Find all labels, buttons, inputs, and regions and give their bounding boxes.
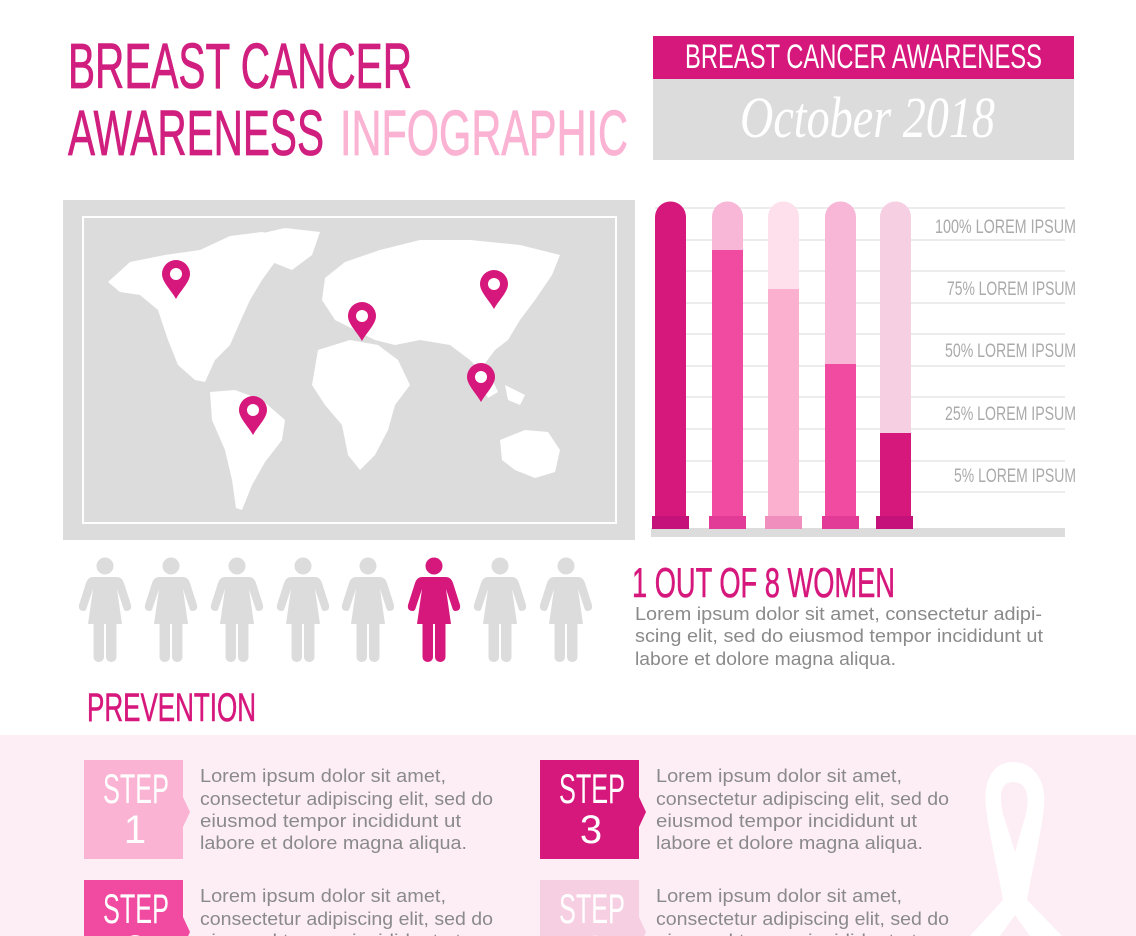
stat: 1 out of 8 women [632, 559, 1043, 669]
step 2 [84, 880, 493, 936]
step 1: 1 [124, 808, 146, 852]
step 2: Lorem ipsum dolor sit amet, [200, 886, 446, 906]
header badge [653, 36, 1074, 160]
step 1: consectetur adipiscing elit, sed do [200, 789, 493, 809]
stat: 1 out of 8 women: scing elit, sed do eiusmod tempor incididunt ut [635, 626, 1043, 646]
heading: prevention: PREVENTION [87, 686, 256, 730]
step 3: consectetur adipiscing elit, sed do [656, 789, 949, 809]
header badge: October 2018 [740, 85, 995, 150]
stat: 1 out of 8 women: Lorem ipsum dolor sit amet, consectetur adipi- [635, 604, 1042, 624]
chart labels: 5% LOREM IPSUM [954, 466, 1076, 487]
title [68, 30, 628, 169]
stat: 1 out of 8 women: 1 OUT OF 8 WOMEN [632, 559, 895, 606]
bar chart [651, 202, 1076, 537]
panel: world map [63, 200, 635, 540]
step 3 [540, 760, 949, 859]
step 3: eiusmod tempor incididunt ut [656, 811, 917, 831]
step 1 [84, 760, 493, 859]
title: AWARENESS [68, 97, 324, 169]
step 4: Lorem ipsum dolor sit amet, [656, 886, 902, 906]
chart labels: 25% LOREM IPSUM [945, 404, 1076, 425]
step 1: STEP [103, 765, 169, 812]
chart labels [935, 217, 1076, 487]
stat: 1 out of 8 women: labore et dolore magna aliqua. [635, 649, 896, 669]
step 2: consectetur adipiscing elit, sed do [200, 909, 493, 929]
step 3: labore et dolore magna aliqua. [656, 833, 923, 853]
step 1: Lorem ipsum dolor sit amet, [200, 766, 446, 786]
icon: women row [79, 558, 592, 662]
step 1: labore et dolore magna aliqua. [200, 833, 467, 853]
step 3: STEP [559, 765, 625, 812]
chart labels: 100% LOREM IPSUM [935, 217, 1076, 238]
icon: ribbon [970, 762, 1062, 936]
step 2: STEP [103, 885, 169, 932]
panel: prevention steps [0, 735, 1136, 936]
title: INFOGRAPHIC [340, 97, 628, 169]
step 4: consectetur adipiscing elit, sed do [656, 909, 949, 929]
step 3: 3 [580, 808, 602, 852]
step 4: STEP [559, 885, 625, 932]
continents [108, 228, 560, 510]
title: BREAST CANCER [68, 30, 412, 102]
step 3: Lorem ipsum dolor sit amet, [656, 766, 902, 786]
step 4 [540, 880, 949, 936]
icon: pins [162, 260, 508, 435]
chart labels: 75% LOREM IPSUM [947, 279, 1076, 300]
chart labels: 50% LOREM IPSUM [945, 341, 1076, 362]
step 1: eiusmod tempor incididunt ut [200, 811, 461, 831]
